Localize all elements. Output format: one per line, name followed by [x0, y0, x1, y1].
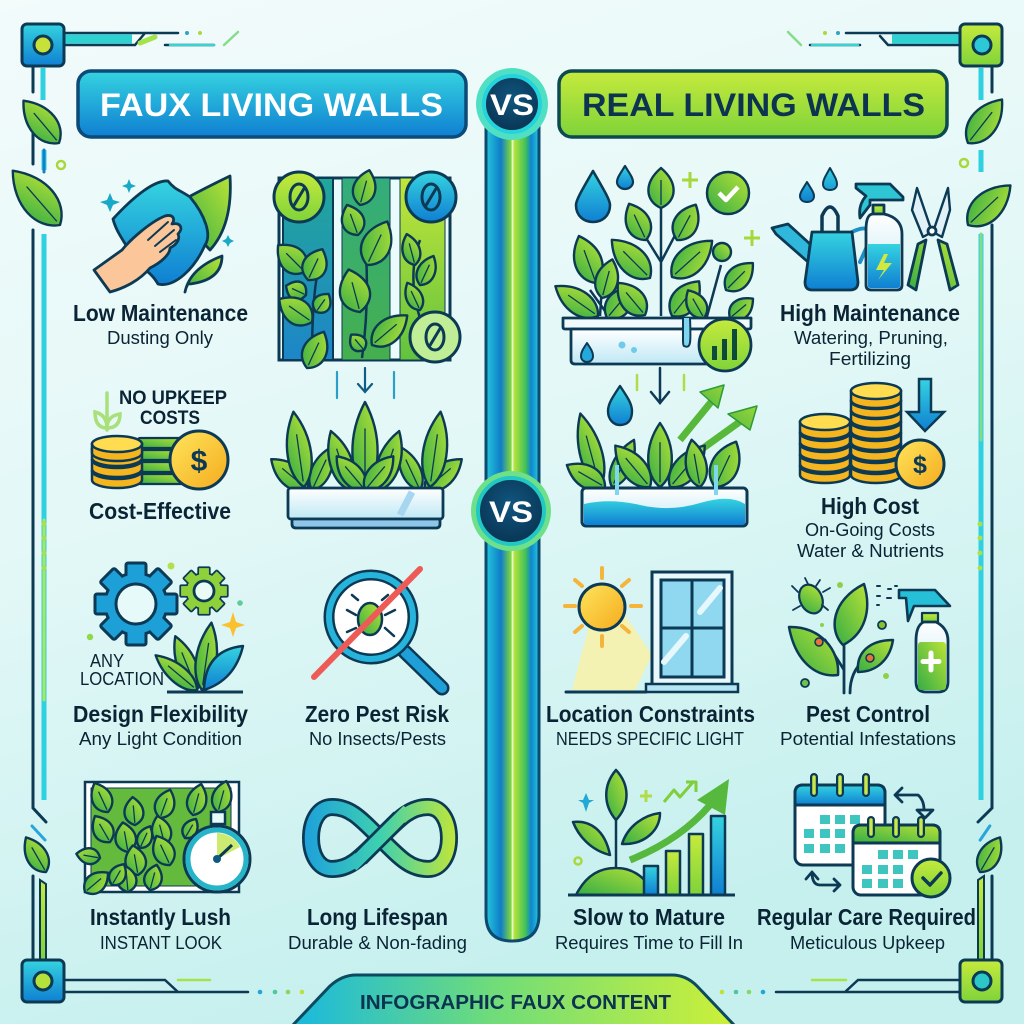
heading: real living walls: REAL LIVING WALLS — [582, 87, 925, 123]
icon: faux wall panel with no-symbols — [269, 167, 460, 373]
icon: faux plant in planter — [264, 402, 469, 528]
text: regular care required: Regular Care Required — [757, 904, 976, 930]
text: slow to mature: Requires Time to Fill In — [555, 933, 743, 953]
text: slow to mature: Slow to Mature — [573, 904, 725, 930]
text: high maintenance: Watering, Pruning, — [794, 328, 948, 348]
text: high maintenance: Fertilizing — [829, 349, 911, 369]
icon: coins and bills: $ — [191, 445, 208, 478]
text: high maintenance: High Maintenance — [780, 300, 960, 326]
frame: bottom left corner — [22, 960, 304, 1002]
text: no upkeep costs callout — [119, 388, 227, 429]
icon: real plant in tray with water drops — [549, 166, 761, 371]
text: pest control: Potential Infestations — [780, 729, 956, 749]
stopwatch — [184, 812, 250, 892]
text: design flexibility: Design Flexibility — [73, 701, 248, 727]
no-symbol badges — [274, 172, 460, 362]
footer banner: INFOGRAPHIC FAUX CONTENT — [360, 992, 671, 1014]
text: high cost — [797, 493, 944, 561]
frame: left rail — [32, 66, 65, 960]
text: location constraints: Location Constraints — [546, 701, 755, 727]
text: instantly lush: Instantly Lush — [90, 904, 231, 930]
icon: calendars with check — [795, 777, 950, 897]
top vs badge: VS — [490, 89, 534, 122]
arrow: down from tray — [637, 368, 684, 403]
text: low maintenance: Low Maintenance — [73, 300, 248, 326]
check badge — [707, 172, 749, 214]
icon: pest infested leaves and spray — [789, 578, 950, 693]
text: instantly lush: INSTANT LOOK — [100, 933, 222, 953]
text: low maintenance — [73, 300, 248, 348]
icon: sprout and growth chart — [568, 770, 735, 895]
text: any location callout: LOCATION — [80, 669, 164, 689]
text: high cost: Water & Nutrients — [797, 541, 944, 561]
text: instantly lush — [90, 904, 231, 953]
frame: top right corner — [788, 24, 1002, 66]
text: low maintenance: Dusting Only — [107, 328, 213, 348]
icon: gears and plant — [87, 562, 245, 697]
icon: lush wall with stopwatch — [75, 779, 250, 899]
icon: tools - watering can, spray, pruners — [772, 168, 958, 290]
growth bars badge — [699, 319, 751, 371]
text: slow to mature — [555, 904, 743, 953]
text: long lifespan: Durable & Non-fading — [288, 933, 467, 953]
text: any location callout — [80, 651, 164, 689]
text: zero pest risk: No Insects/Pests — [309, 729, 446, 749]
text: pest control: Pest Control — [806, 701, 930, 727]
footer banner — [292, 975, 735, 1024]
text: regular care required: Meticulous Upkeep — [790, 933, 945, 953]
icon: real plants growing in water tray — [561, 385, 757, 526]
frame: right leaves — [957, 91, 1020, 877]
frame: right rail — [960, 66, 993, 960]
icon: coin stacks with down arrow: $ — [913, 451, 927, 479]
text: long lifespan — [288, 904, 467, 953]
arrows: wall to planter — [337, 368, 394, 398]
icon: hand wiping leaf with cloth — [94, 176, 234, 292]
top vs badge — [476, 68, 548, 140]
text: any location callout: ANY — [90, 651, 124, 671]
center divider pole — [471, 68, 551, 941]
text: pest control — [780, 701, 956, 749]
frame: top left corner — [22, 24, 238, 66]
icon: sun and window — [565, 568, 738, 692]
text: design flexibility — [73, 701, 248, 749]
frame: left leaves — [0, 92, 72, 877]
icon: coin stacks with down arrow — [800, 379, 944, 488]
middle vs badge — [471, 471, 551, 551]
icon: coins and bills — [92, 393, 228, 489]
heading: real living walls — [559, 71, 947, 137]
text: no upkeep costs callout: NO UPKEEP — [119, 388, 227, 409]
icon: infinity loop — [311, 807, 449, 869]
text: regular care required — [757, 904, 976, 953]
text: cost-effective: Cost-Effective — [89, 498, 231, 524]
text: high cost: On-Going Costs — [805, 520, 935, 540]
text: long lifespan: Long Lifespan — [307, 904, 448, 930]
icon: magnifier with crossed-out bug — [314, 569, 442, 688]
text: no upkeep costs callout: COSTS — [140, 408, 200, 429]
text: location constraints — [546, 701, 755, 749]
text: zero pest risk — [305, 701, 449, 749]
middle vs badge: VS — [489, 496, 533, 529]
frame: bottom right corner — [720, 960, 1002, 1002]
text: design flexibility: Any Light Condition — [79, 729, 242, 749]
text: location constraints: NEEDS SPECIFIC LIGHT — [556, 729, 744, 749]
text: zero pest risk: Zero Pest Risk — [305, 701, 449, 727]
heading: faux living walls: FAUX LIVING WALLS — [100, 87, 443, 123]
text: high maintenance — [780, 300, 960, 369]
text: high cost: High Cost — [821, 493, 919, 519]
heading: faux living walls — [78, 71, 466, 137]
